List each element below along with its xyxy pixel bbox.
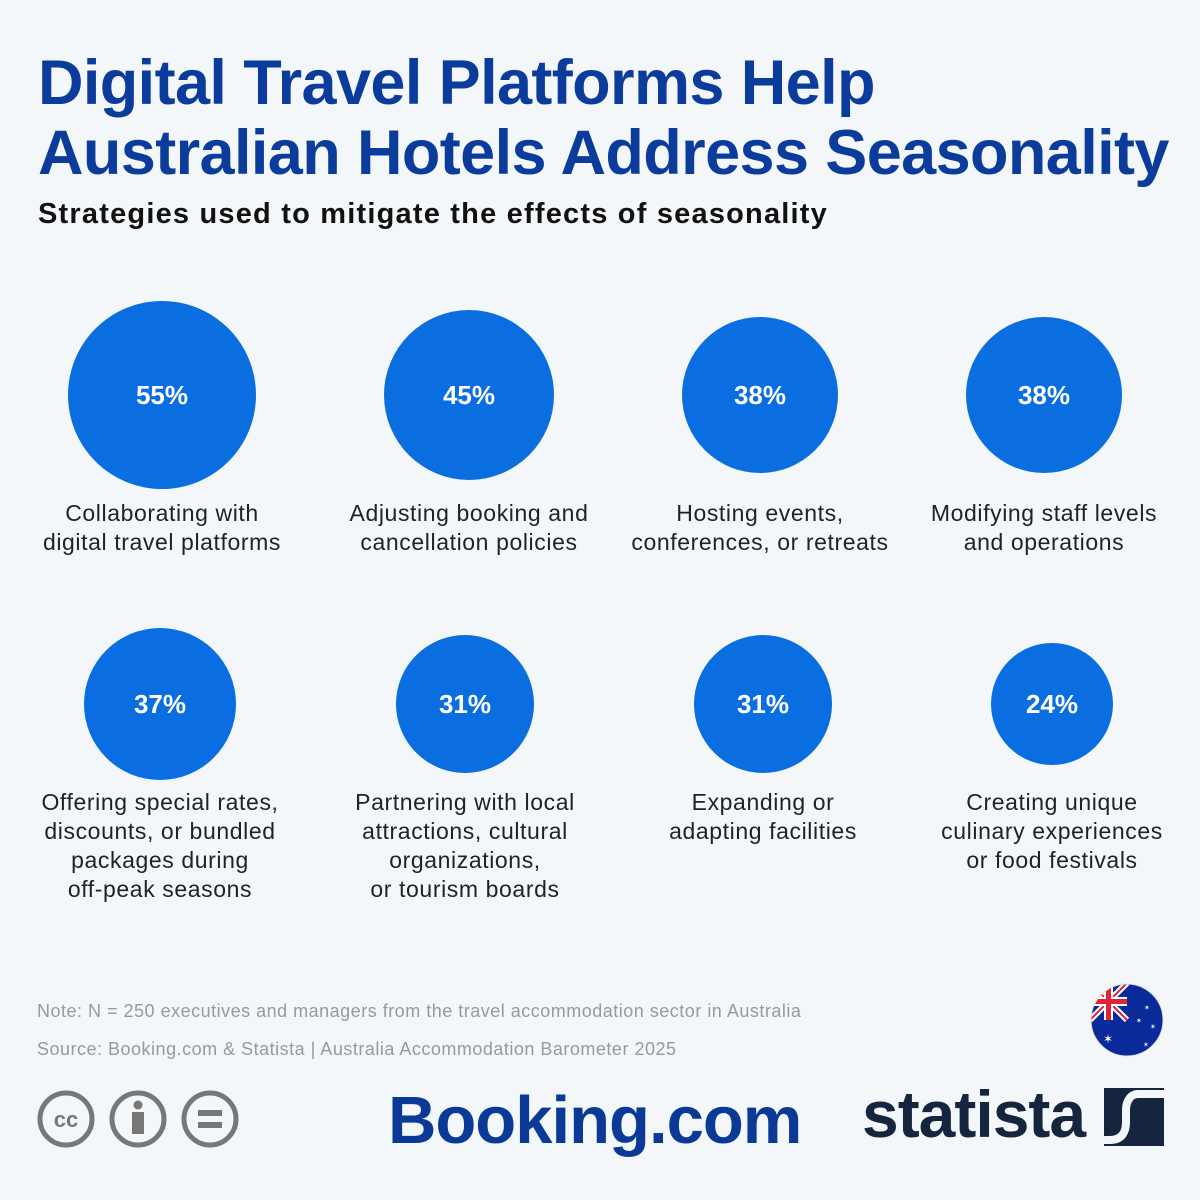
- circle: 37%: [84, 628, 236, 780]
- label: 24%: [941, 789, 1163, 873]
- label: 55%: digital travel platforms: [43, 529, 281, 555]
- note: Note: N = 250 executives and managers from the travel accommodation sector in Australia: [37, 1001, 801, 1021]
- label: 31% b: [669, 789, 857, 844]
- circle: 55%: [68, 301, 256, 489]
- icon: creative commons: [38, 1090, 238, 1148]
- label: 55%: Collaborating with: [65, 500, 259, 526]
- source: Source: Booking.com & Statista | Australia Accommodation Barometer 2025: [37, 1039, 676, 1059]
- label: 55%: [43, 500, 281, 555]
- subtitle: Strategies used to mitigate the effects of seasonality: [38, 198, 828, 230]
- icon: australian flag: ✶: [1144, 1004, 1150, 1012]
- label: 37%: packages during: [71, 847, 249, 873]
- label: 31% b: adapting facilities: [669, 818, 857, 844]
- circle: 38% b: 38%: [1018, 380, 1070, 410]
- icon: creative commons: cc: [54, 1107, 78, 1132]
- label: 38% a: Hosting events,: [676, 500, 844, 526]
- label: 24%: or food festivals: [966, 847, 1138, 873]
- title: Australian Hotels Address Seasonality: [38, 118, 1169, 188]
- icon: australian flag: ✶: [1143, 1041, 1149, 1049]
- circle: 38% b: [966, 317, 1122, 473]
- label: 31% b: Expanding or: [692, 789, 834, 815]
- circle: 38% a: [682, 317, 838, 473]
- circle: 45%: 45%: [443, 380, 495, 410]
- label: 24%: Creating unique: [966, 789, 1138, 815]
- label: 38% b: Modifying staff levels: [931, 500, 1157, 526]
- circle: 24%: [991, 643, 1113, 765]
- label: 37%: off-peak seasons: [68, 876, 252, 902]
- label: 31% a: [355, 789, 575, 902]
- logo: statista: statista: [862, 1077, 1085, 1151]
- label: 45%: cancellation policies: [360, 529, 578, 555]
- circle: 24%: 24%: [1026, 688, 1078, 718]
- label: 37%: Offering special rates,: [41, 789, 279, 815]
- label: 38% b: and operations: [964, 529, 1124, 555]
- circle: 31% b: 31%: [737, 688, 789, 718]
- label: 37%: discounts, or bundled: [44, 818, 276, 844]
- label: 31% a: organizations,: [389, 847, 541, 873]
- circle: 31% a: [396, 635, 534, 773]
- circle: 38% a: 38%: [734, 380, 786, 410]
- label: 38% a: [631, 500, 889, 555]
- circle: 37%: 37%: [134, 688, 186, 718]
- icon: australian flag: ✶: [1150, 1023, 1156, 1031]
- icon: australian flag: ✶: [1136, 1017, 1142, 1025]
- label: 31% a: attractions, cultural: [362, 818, 568, 844]
- label: 37%: [41, 789, 279, 902]
- icon: australian flag: ✶: [1103, 1032, 1113, 1046]
- icon: australian flag: [1090, 984, 1164, 1056]
- label: 31% a: or tourism boards: [370, 876, 560, 902]
- label: 38% b: [931, 500, 1157, 555]
- circle: 31% b: [694, 635, 832, 773]
- label: 24%: culinary experiences: [941, 818, 1163, 844]
- label: 38% a: conferences, or retreats: [631, 529, 889, 555]
- label: 45%: [350, 500, 588, 555]
- circle: 31% a: 31%: [439, 688, 491, 718]
- circle: 55%: 55%: [136, 380, 188, 410]
- circle: 45%: [384, 310, 554, 480]
- label: 45%: Adjusting booking and: [350, 500, 588, 526]
- label: 31% a: Partnering with local: [355, 789, 575, 815]
- title: Digital Travel Platforms Help: [38, 48, 875, 118]
- logo: booking.com: Booking.com: [388, 1083, 801, 1158]
- title: [38, 48, 1169, 188]
